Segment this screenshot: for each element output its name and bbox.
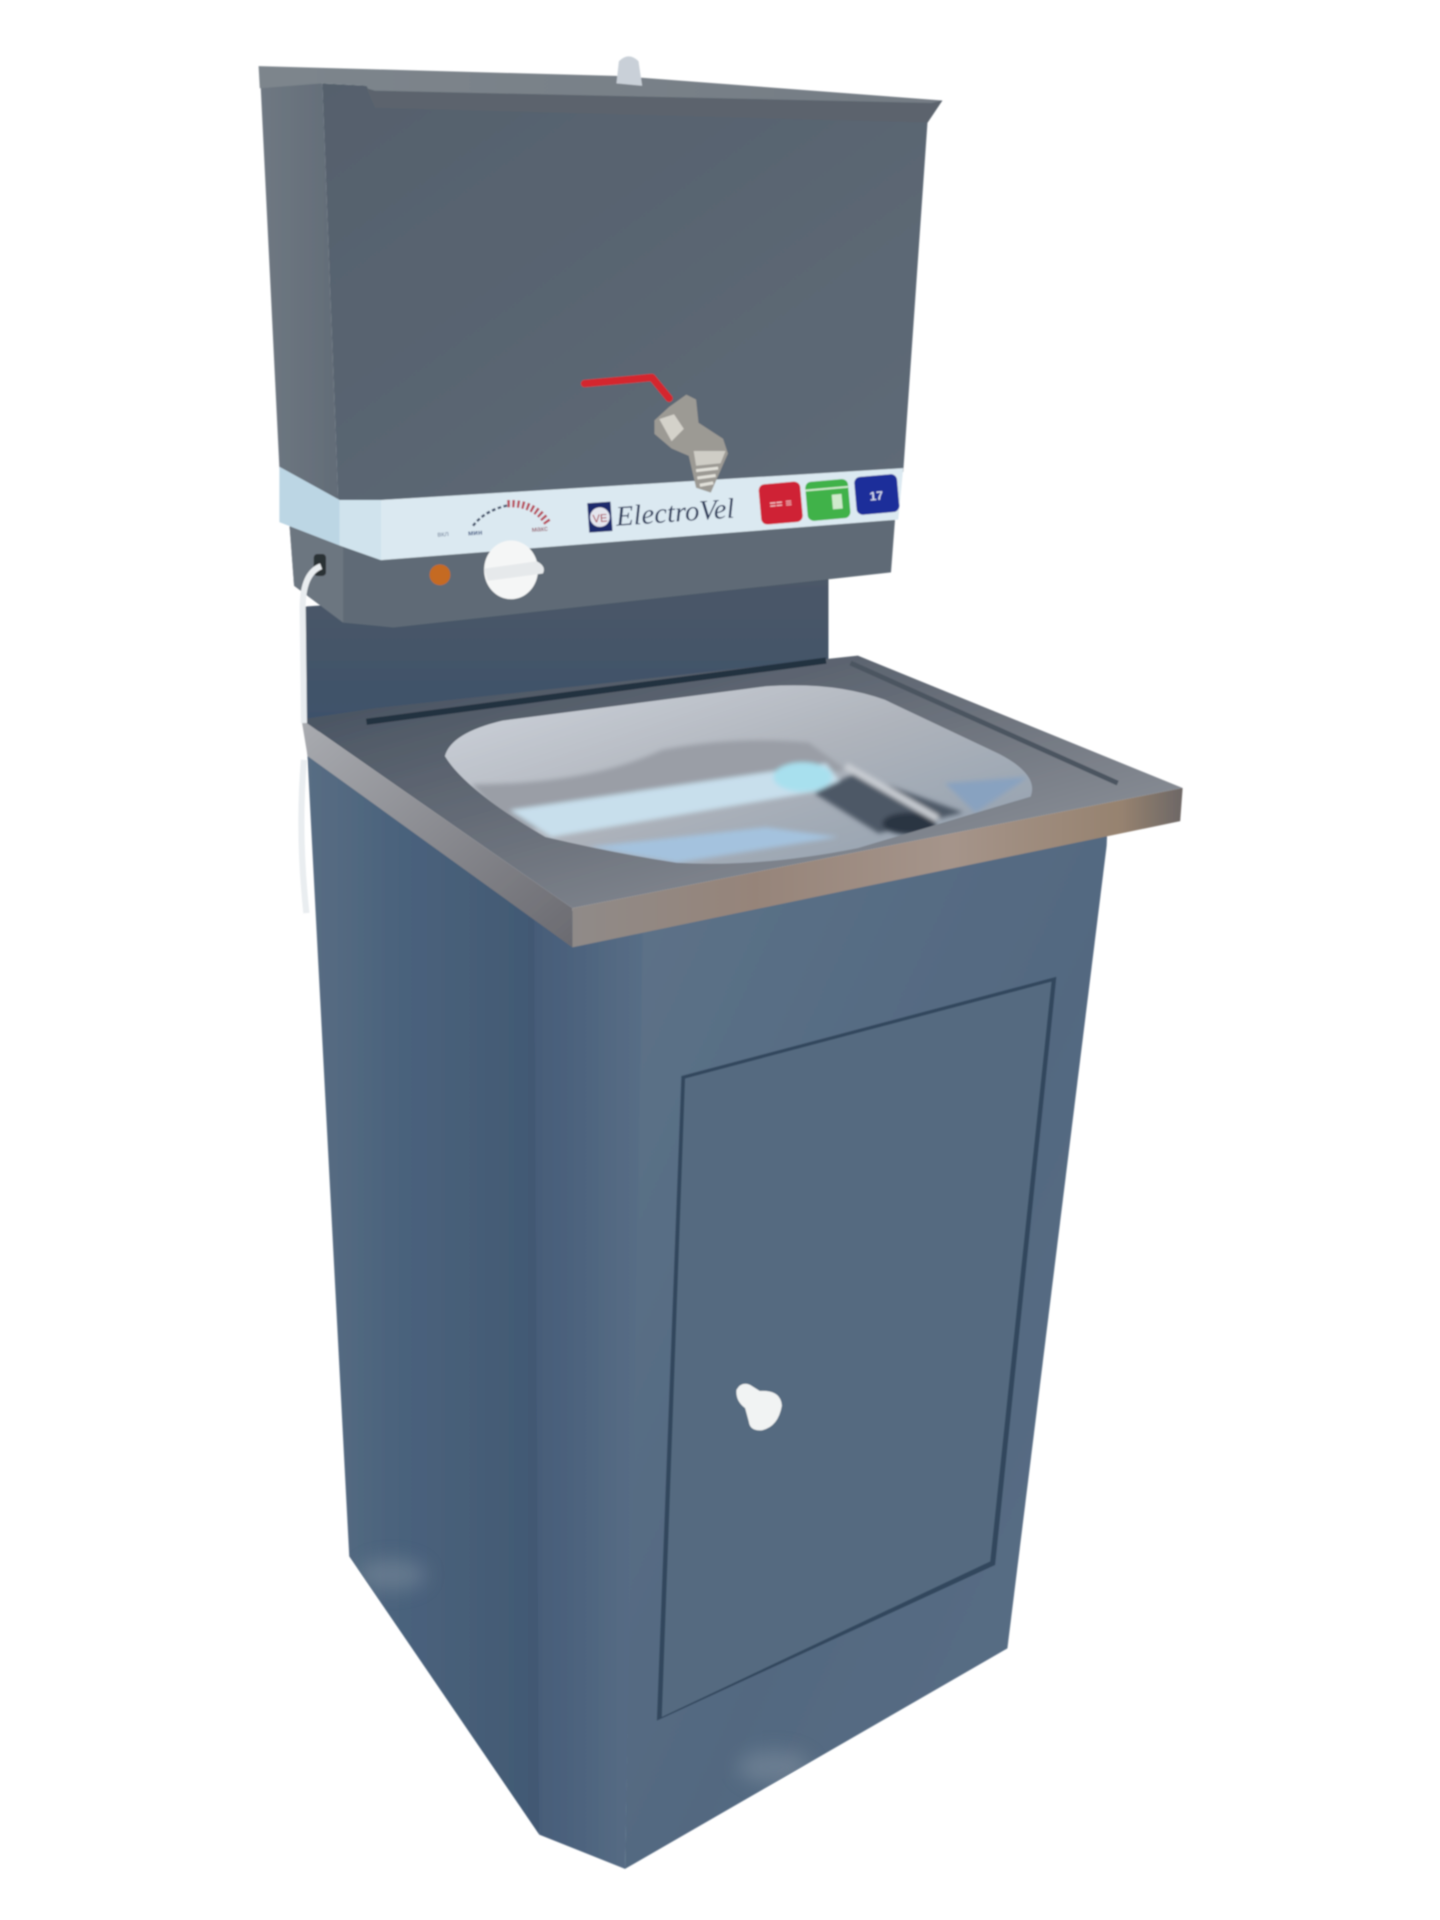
basin wall shading [472, 740, 846, 833]
basin drain step [814, 773, 963, 833]
temperature scale: вкл [437, 529, 449, 539]
water tank: front face [322, 83, 928, 502]
product photo: washstand with heated tank [258, 56, 1184, 1870]
brand logo: VE [592, 513, 608, 526]
temperature scale: макс [531, 524, 548, 534]
sink back groove [366, 661, 826, 722]
badge: blue [854, 474, 900, 515]
cabinet: front face [625, 815, 1108, 1869]
faucet [585, 377, 728, 493]
badge: red: == ≡ [769, 497, 792, 511]
sink counter top [301, 656, 1183, 908]
cabinet door [657, 977, 1056, 1721]
cabinet: corner facet [534, 907, 646, 1869]
brand name: ElectroVel [614, 494, 736, 533]
badge: red [758, 481, 803, 525]
floor reflections [358, 1559, 811, 1784]
red lever [585, 377, 669, 398]
label band [279, 467, 903, 560]
temperature scale [437, 504, 548, 539]
brand logo [587, 502, 613, 533]
badge: green [805, 479, 851, 521]
steel basin [444, 684, 1033, 864]
water tank: lid [259, 66, 942, 119]
basin lower floor [588, 827, 838, 863]
power cord [301, 554, 326, 913]
door knob [736, 1384, 782, 1430]
tap body [654, 395, 728, 493]
basin floor highlight [510, 764, 844, 837]
lid cap [616, 56, 642, 86]
sink right groove [851, 663, 1118, 783]
indicator lamp [430, 564, 450, 585]
water tank: side face [260, 69, 338, 502]
sink front edge [572, 788, 1183, 947]
backsplash panel [304, 570, 828, 735]
badge: blue: 17 [869, 488, 884, 504]
temperature scale: мин [468, 528, 483, 538]
water tank: lower control box [289, 509, 896, 627]
sink left edge [301, 719, 572, 947]
cabinet: left side face [306, 735, 576, 1835]
thermostat knob [484, 540, 544, 599]
